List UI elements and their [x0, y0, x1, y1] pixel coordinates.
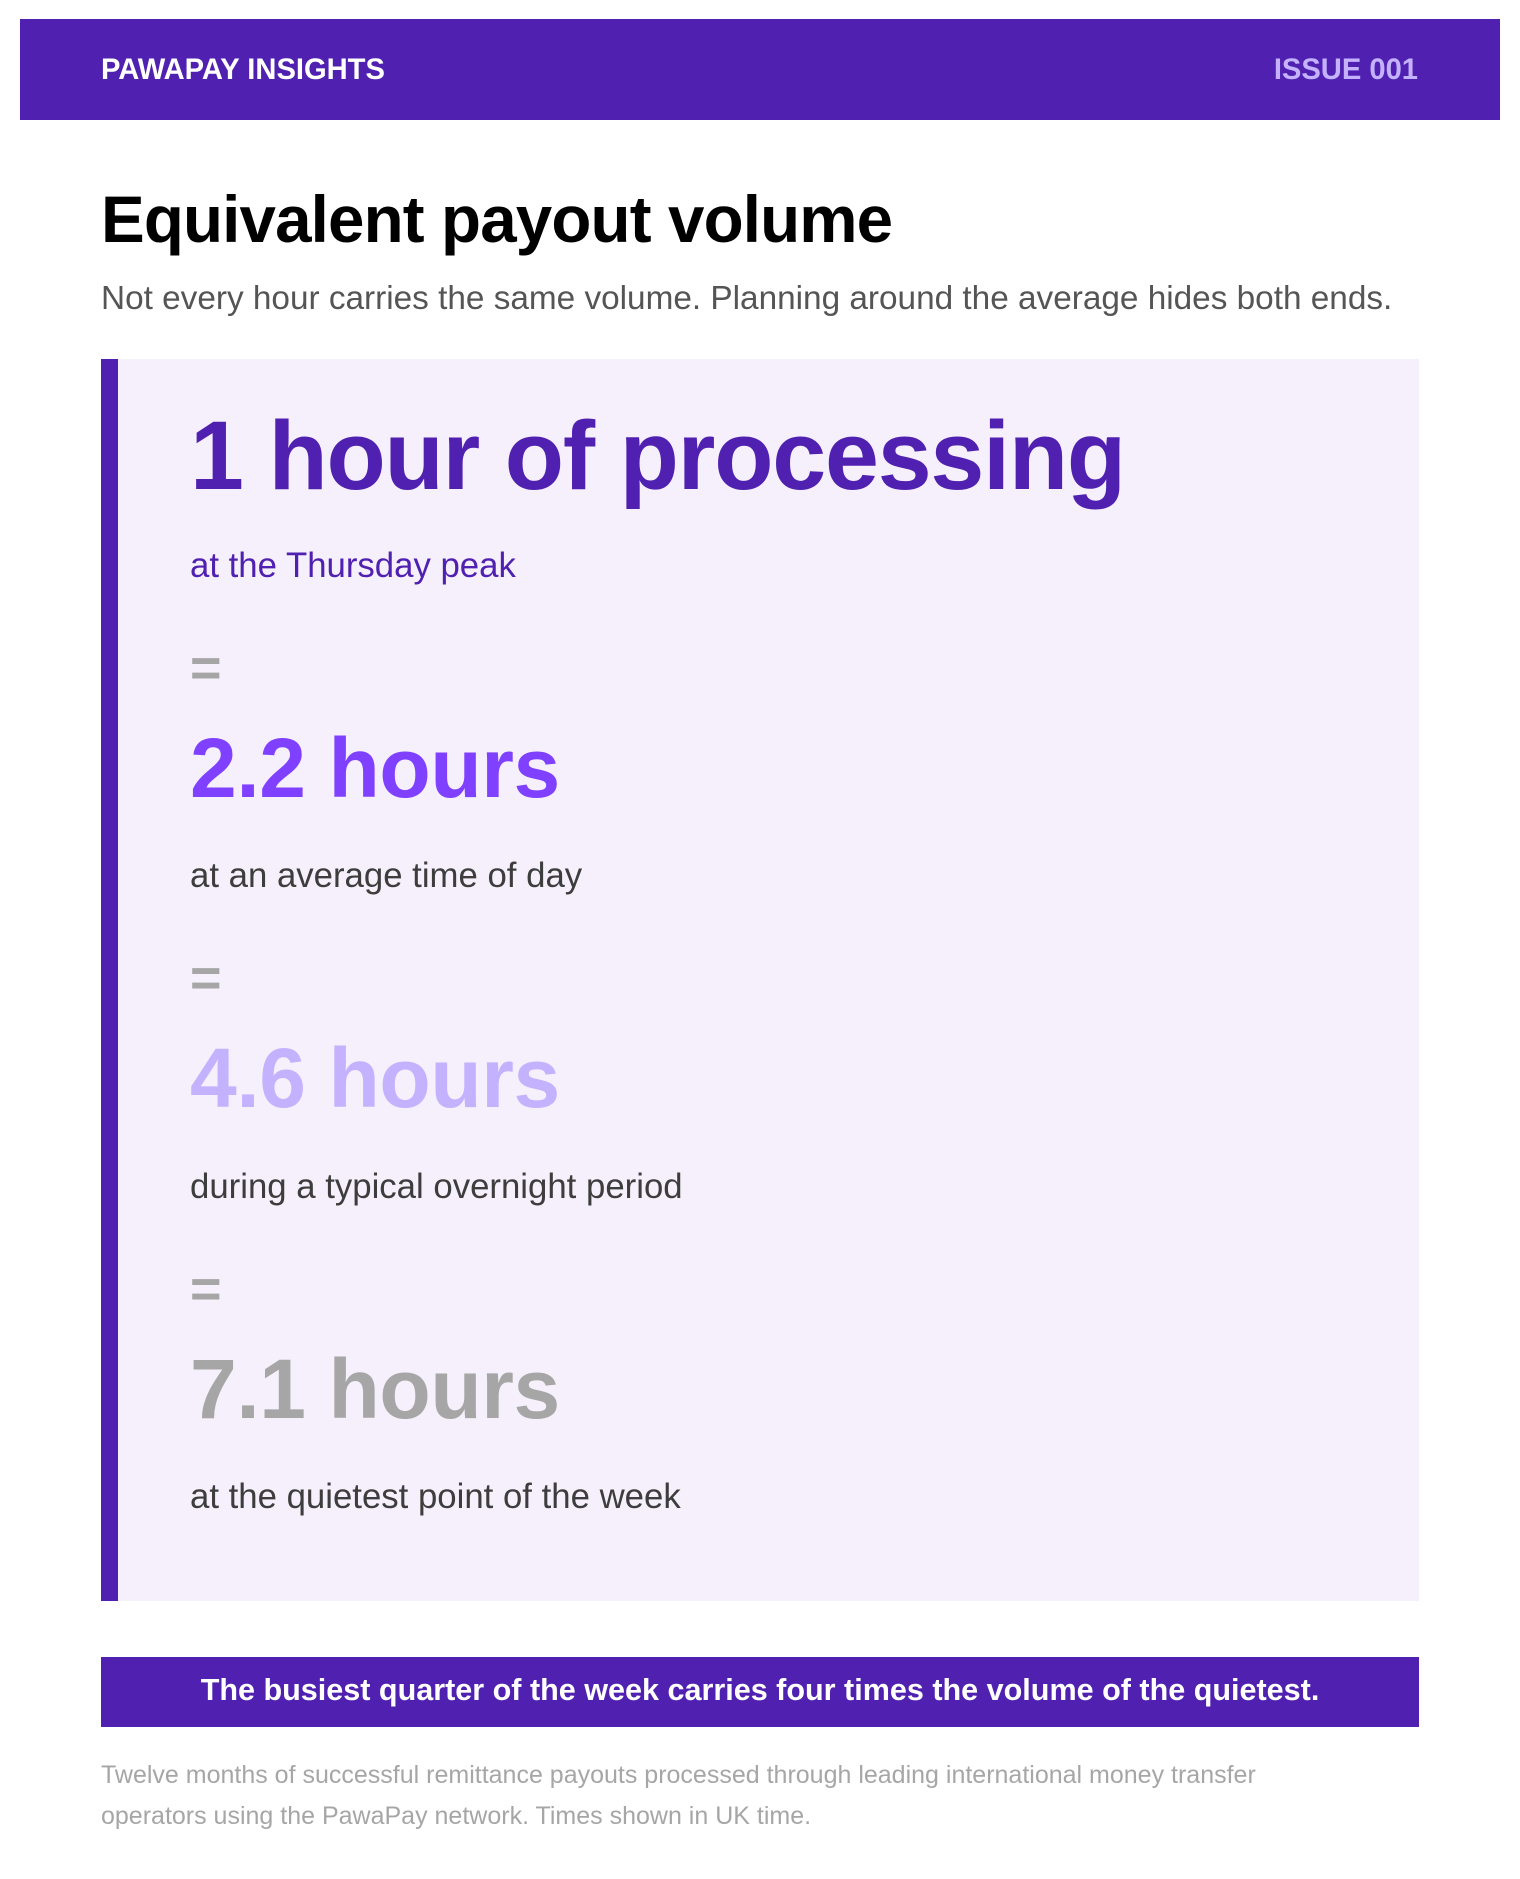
footnote: operators using the PawaPay network. Times shown in UK time.: [101, 1802, 811, 1830]
caption: quietest: at the quietest point of the week: [190, 1478, 681, 1516]
figure: overnight: 4.6 hours: [190, 1031, 560, 1125]
figure: quietest: 7.1 hours: [190, 1342, 560, 1436]
headline caption: at the Thursday peak: [190, 547, 516, 585]
callout banner: [101, 1657, 1419, 1727]
panel accent bar: [101, 359, 118, 1601]
subtitle: Not every hour carries the same volume. Planning around the average hides both ends.: [101, 280, 1392, 317]
caption: overnight: during a typical overnight period: [190, 1168, 683, 1206]
title: Equivalent payout volume: [101, 183, 892, 256]
equals sign 1: =: [190, 638, 222, 698]
footnote: Twelve months of successful remittance payouts processed through leading international money transfer: [101, 1761, 1256, 1789]
equals sign 2: =: [190, 948, 222, 1008]
equals sign 3: =: [190, 1259, 222, 1319]
caption: average: at an average time of day: [190, 857, 582, 895]
panel: equivalence list: [101, 359, 1419, 1601]
callout banner: The busiest quarter of the week carries four times the volume of the quietest.: [201, 1673, 1319, 1707]
header band: [20, 19, 1500, 120]
figure: average: 2.2 hours: [190, 721, 560, 815]
headline figure: 1 hour of processing: [190, 401, 1125, 510]
footnote: [101, 1761, 1256, 1830]
brand label: PAWAPAY INSIGHTS: [101, 54, 385, 86]
issue label: ISSUE 001: [1274, 54, 1418, 86]
